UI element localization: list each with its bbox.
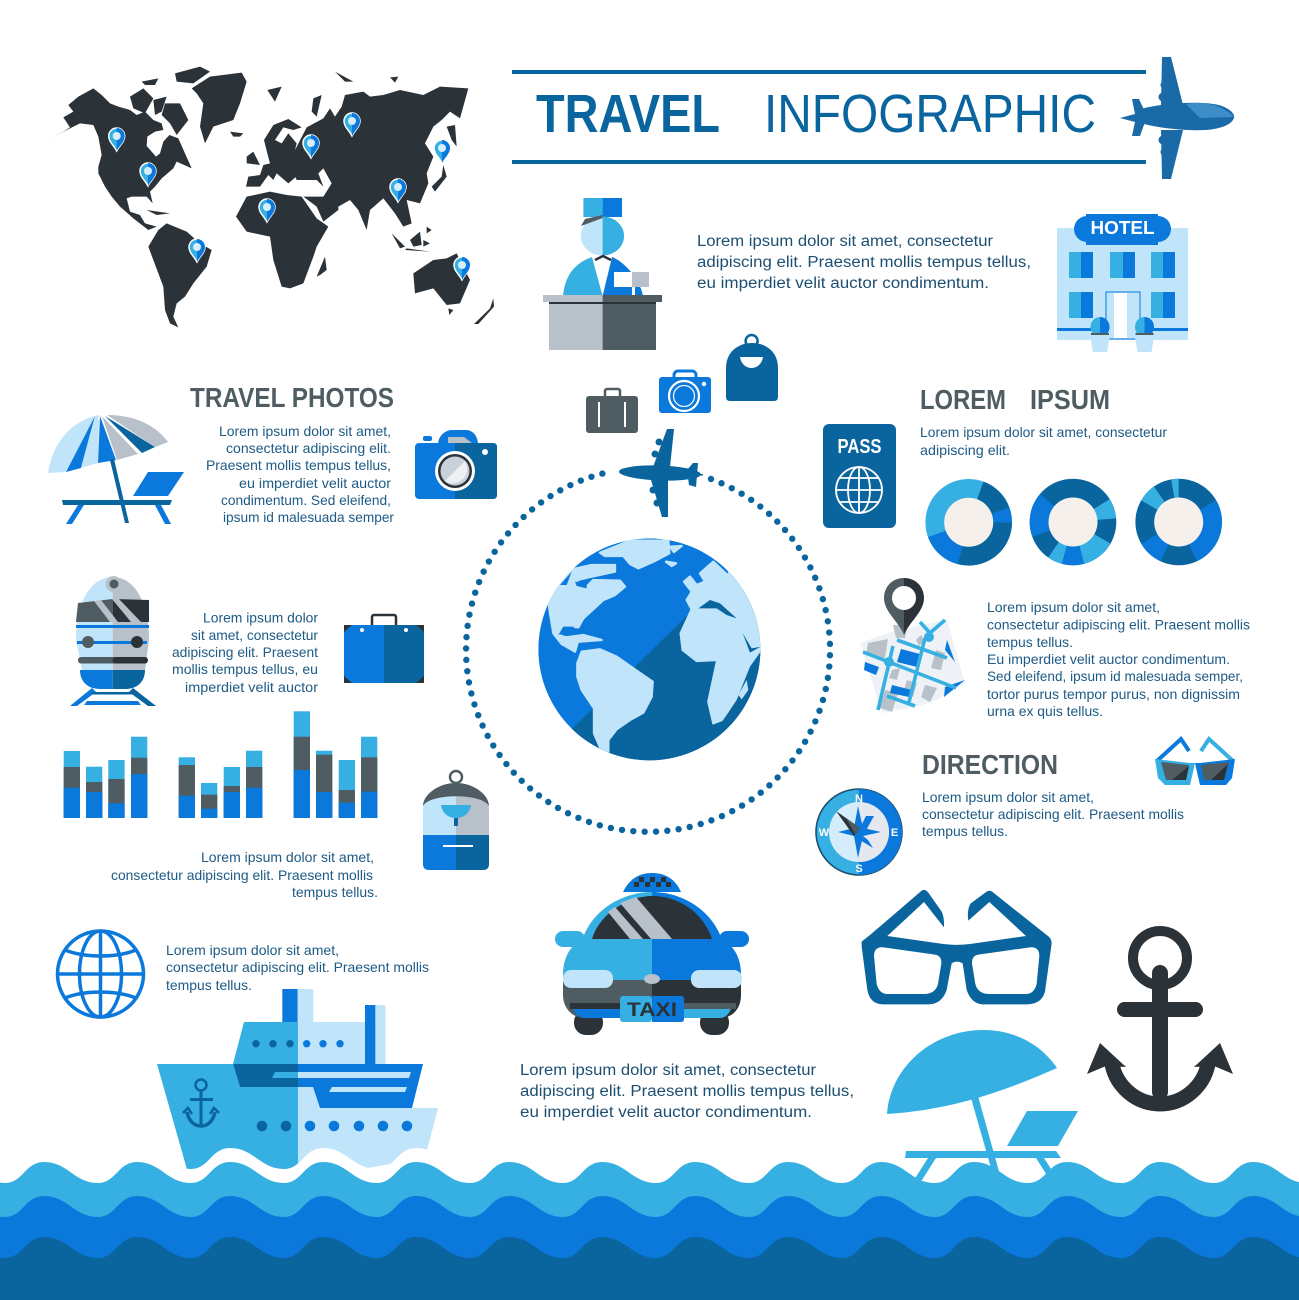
donut chart 1 [935,488,1002,556]
text: globe: consectetur adipiscing elit. Praesent mollis [166,959,429,975]
donut chart 3 [1145,488,1212,556]
compass letters: S [855,863,863,875]
icon: ship [157,989,438,1180]
text: travel photos [206,423,394,525]
bar chart 1 [64,737,147,818]
text: train: imperdiet velit auctor [185,679,318,695]
map pins [109,113,470,280]
text: bar charts [111,849,378,900]
icon: navy backpack [726,335,778,401]
heading: lorem ipsum: IPSUM [1030,384,1110,415]
icon: taxi [555,873,749,1035]
dotted flight route circle [466,472,830,832]
text: map: Sed eleifend, ipsum id malesuada semper, [987,668,1243,684]
text: train: mollis tempus tellus, eu [172,661,318,677]
hotel sign text: HOTEL [1090,217,1154,238]
text: map [987,599,1250,719]
text: lorem ipsum: adipiscing elit. [920,442,1010,458]
text: taxi: Lorem ipsum dolor sit amet, consectetur [520,1062,816,1079]
icon: blue suitcase [344,615,424,683]
compass letters: E [891,827,898,839]
icon: train [70,576,156,706]
text: travel photos: condimentum. Sed eleifend, [221,492,391,508]
text: direction [922,789,1184,839]
icon: small blue camera [659,371,711,413]
heading: lorem ipsum: LOREM [920,384,1006,415]
title banner [512,57,1234,179]
text: bar charts: consectetur adipiscing elit. Praesent mollis [111,867,373,883]
passport label: PASS [838,436,882,458]
white foam band under ship [0,1148,1299,1211]
text: map: tempus tellus. [987,634,1073,650]
heading: direction: DIRECTION [922,749,1058,780]
text: map: Lorem ipsum dolor sit amet, [987,599,1160,615]
text: map: urna ex quis tellus. [987,703,1103,719]
text: train: sit amet, consectetur [191,627,318,643]
text: travel photos: Praesent mollis tempus tellus, [206,457,391,473]
icon: large airplane [1120,57,1234,179]
icon: anchor [1087,931,1233,1104]
title: travel: TRAVEL [536,84,720,144]
location pin [884,578,924,635]
text: train [172,610,318,695]
icon: pale backpack [423,771,489,870]
icon: big glasses [862,890,1052,1004]
taxi plate text: TAXI [627,1000,677,1021]
text: direction: tempus tellus. [922,823,1008,839]
text: direction: consectetur adipiscing elit. Praesent mollis [922,806,1184,822]
bar chart 2 [179,751,262,818]
icon: hotel [1057,214,1188,352]
compass letters [819,793,898,875]
text: travel photos: eu imperdiet velit auctor [239,475,391,491]
text: map: tortor purus tempor purus, non dignissim [987,686,1240,702]
heading: lorem ipsum [920,384,1110,415]
text: direction: Lorem ipsum dolor sit amet, [922,789,1094,805]
world map [48,67,494,327]
icon: compass [816,789,902,875]
text: travel photos: ipsum id malesuada semper [223,509,394,525]
text: reception: Lorem ipsum dolor sit amet, consectetur [697,233,993,250]
text: globe [166,942,429,993]
text: taxi [520,1062,854,1121]
text: map: consectetur adipiscing elit. Praesent mollis [987,616,1250,632]
text: taxi: eu imperdiet velit auctor condimentum. [520,1104,812,1121]
icon: striped beach umbrella and lounger [48,415,184,524]
text: bar charts: tempus tellus. [292,884,378,900]
icon: grey suitcase [586,389,638,433]
donut chart 2 [1039,488,1107,556]
text: globe: Lorem ipsum dolor sit amet, [166,942,339,958]
text: train: Lorem ipsum dolor [203,610,318,626]
text: reception: adipiscing elit. Praesent mollis tempus tellus, [697,254,1031,271]
text: bar charts: Lorem ipsum dolor sit amet, [201,849,374,865]
icon: city map with location pin [860,578,965,713]
icon: central globe [538,538,760,760]
text: globe: tempus tellus. [166,977,252,993]
text: reception: eu imperdiet velit auctor condimentum. [697,275,989,292]
icon: sunglasses [1155,739,1235,785]
text: map: Eu imperdiet velit auctor condimentum. [987,651,1230,667]
icon: large camera [415,430,497,499]
icon: big beach umbrella and lounger [887,1030,1078,1180]
icon: airplane on route [619,429,703,517]
ship anchor [183,1080,219,1126]
title: infographic: INFOGRAPHIC [764,84,1096,144]
text: travel photos: consectetur adipiscing elit. [226,440,391,456]
icon: passport [823,424,896,528]
compass letters: W [819,827,830,839]
icon: hotel clerk at reception desk [543,198,662,350]
compass letters: N [855,793,863,805]
waves [0,1162,1299,1300]
text: lorem ipsum: Lorem ipsum dolor sit amet, consectetur [920,424,1167,440]
text: travel photos: Lorem ipsum dolor sit amet, [219,423,391,439]
text: reception [697,233,1031,292]
text: taxi: adipiscing elit. Praesent mollis tempus tellus, [520,1083,854,1100]
bar chart 3 [294,711,377,818]
text: train: adipiscing elit. Praesent [172,644,318,660]
text: lorem ipsum [920,424,1167,458]
heading: travel photos: TRAVEL PHOTOS [190,382,394,413]
icon: wire globe [58,931,144,1017]
